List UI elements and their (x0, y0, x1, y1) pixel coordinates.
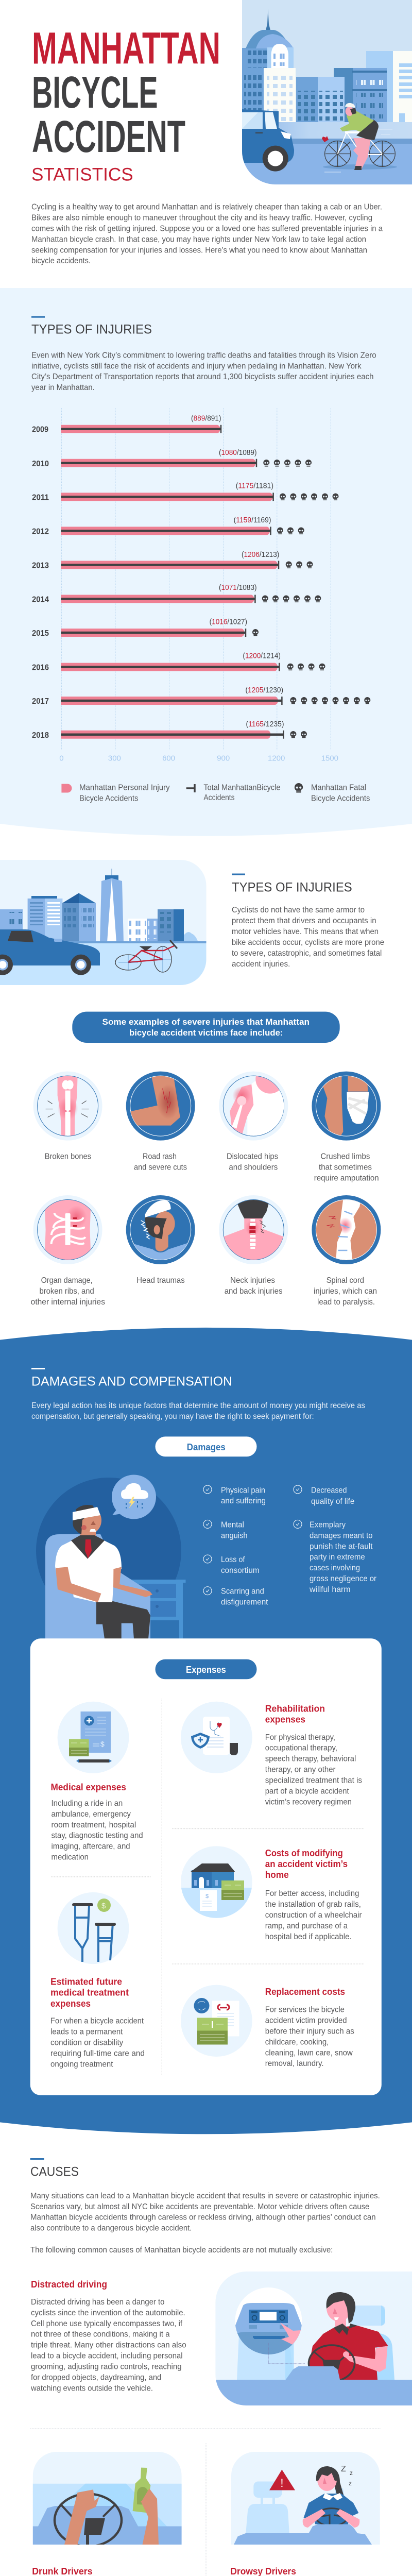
icon: medical bill (58, 1702, 129, 1773)
text: cyclists armor: to severe, catastrophic, and sometimes fatal (232, 949, 382, 958)
text: medical expenses: Medical expenses (50, 1782, 126, 1792)
labels: injury types: and back injuries (225, 1287, 283, 1296)
title: BICYCLE (32, 67, 158, 117)
text: causes intro: also contribute to a dangerous bicycle accident. (30, 2224, 192, 2233)
bar chart: bicycle accidents by year: (1016/1027) (210, 618, 247, 626)
text: costs of modifying home: home (265, 1870, 289, 1880)
text: causes intro (30, 2192, 380, 2255)
intro text: Bikes are also nimble enough to maneuver throughout the city and its heavy traffic. However, cycling (31, 213, 372, 222)
text: costs of modifying home (265, 1848, 362, 1941)
text: rehabilitation expenses: For physical therapy, (265, 1733, 335, 1742)
icon: rehabilitation (181, 1702, 252, 1773)
labels: injury types: Road rash (143, 1152, 177, 1161)
list: damages checklist: Exemplary (310, 1520, 346, 1529)
list: damages checklist: Decreased (311, 1486, 347, 1495)
labels: injury types: injuries, which can (314, 1287, 377, 1296)
text: distracted driving: grooming, adjusting radio controls, reaching (31, 2363, 182, 2371)
icon: broken bones (33, 1072, 102, 1141)
text: injuries intro: City’s Department of Transportation reports that around 1,300 bicyclists suffer accident injuries each (31, 372, 374, 381)
list: damages checklist: and suffering (221, 1497, 266, 1505)
text: future medical: condition or disability (50, 2038, 124, 2047)
icon: dislocated hips (219, 1065, 288, 1141)
text: costs of modifying home: For better access, including (265, 1889, 359, 1898)
intro text (31, 203, 383, 265)
bar chart: bicycle accidents by year: (1200/1214) (243, 652, 281, 660)
button: expenses (156, 1659, 256, 1679)
text: cyclists armor: motor vehicles have. This means that when (232, 927, 379, 936)
text: future medical: For when a bicycle accident (50, 2017, 144, 2026)
title: STATISTICS (31, 164, 133, 184)
list: damages checklist: party in extreme (310, 1553, 365, 1562)
text: replacement costs: childcare, cooking, (265, 2038, 329, 2046)
icon: head trauma (126, 1195, 195, 1264)
intro text: Cycling is a healthy way to get around Manhattan and is relatively cheaper than taking a cab or an Uber. (31, 203, 382, 211)
text: distracted driving: triple threat. Many other distractions can also (31, 2341, 186, 2350)
labels: injury types: lead to paralysis. (317, 1298, 375, 1307)
labels: injury types: Crushed limbs (320, 1152, 370, 1161)
text: cyclists armor (232, 906, 384, 969)
text: replacement costs: Replacement costs (265, 1987, 345, 1997)
bar chart: bicycle accidents by year: 2011 (32, 493, 49, 502)
intro text: comes with the risk of getting injured. Suppose you or a loved one has suffered preventable injuries in a (31, 224, 383, 233)
text: costs of modifying home: hospital bed if applicable. (265, 1933, 352, 1941)
text: distracted driving: watching events outside the vehicle. (30, 2384, 153, 2393)
text: future medical: medical treatment (50, 1987, 129, 1997)
text: rehabilitation expenses: part of a bicycle accident (265, 1787, 349, 1796)
icon: crutches: $ (101, 1902, 106, 1910)
text: distracted driving: Distracted driving (31, 2279, 107, 2290)
list: damages checklist: Loss of (221, 1555, 245, 1564)
bar chart: bicycle accidents by year: 2016 (32, 664, 49, 672)
title: MANHATTAN (32, 23, 220, 73)
icon: neck injuries (219, 1195, 288, 1264)
text: future medical: Estimated future (50, 1976, 122, 1987)
list: damages checklist: Mental (221, 1520, 244, 1529)
text: distracted driving: cyclists since the invention of the automobile. (31, 2309, 185, 2317)
legend: Total ManhattanBicycle (203, 783, 280, 792)
text: causes intro: The following common causes of Manhattan bicycle accidents are not mutually exclusive: (30, 2246, 333, 2255)
labels: injury types: that sometimes (319, 1163, 372, 1172)
bar chart: bicycle accidents by year: 2018 (32, 731, 49, 740)
legend: Bicycle Accidents (79, 794, 139, 803)
text: damages intro: compensation, but generally speaking, you may have the right to seek payment for: (31, 1412, 314, 1421)
bar chart: bicycle accidents by year: 2014 (32, 596, 49, 604)
intro text: seeking compensation for your injuries and losses. Here’s what you need to know about Manhattan (31, 246, 367, 255)
text: injuries intro: year in Manhattan. (31, 383, 95, 392)
illustration: city with car and crashed bicycle (0, 860, 207, 985)
icon: medical bill: $ (100, 1740, 105, 1748)
text: cyclists armor: protect them that drivers and occupants in (232, 917, 376, 925)
bar chart: bicycle accidents by year: 2015 (32, 629, 49, 638)
heading: types of injuries second: TYPES OF INJURIES (232, 880, 352, 894)
text: cyclists armor: accident injuries. (232, 960, 290, 969)
text: rehabilitation expenses: Rehabilitation (265, 1704, 325, 1714)
bar chart: bicycle accidents by year: 300 (108, 754, 121, 762)
text: distracted driving (30, 2279, 186, 2393)
intro text: Manhattan bicycle crash. In that case, you may have rights under New York law to take legal action (31, 235, 366, 244)
text: distracted driving: Distracted driving has been a danger to (31, 2298, 164, 2307)
illustration: distracted driver touching radio (215, 2272, 412, 2405)
text: medical expenses: ambulance, emergency (52, 1810, 131, 1819)
illustration: city skyline with car and cyclist (242, 0, 412, 184)
section rule (232, 874, 245, 875)
icon: road rash (126, 1072, 195, 1141)
legend: Manhattan Personal Injury (79, 783, 170, 792)
illustration: drunk driver with bottle (32, 2452, 182, 2547)
list: damages checklist: disfigurement (221, 1598, 268, 1607)
illustration: drowsy driver: z (350, 2469, 353, 2477)
text: costs of modifying home: construction of a wheelchair (265, 1911, 362, 1920)
labels: injury types: other internal injuries (31, 1298, 105, 1307)
text: replacement costs: accident victim provided (265, 2016, 347, 2025)
text: replacement costs: before their injury such as (265, 2027, 354, 2036)
text: medical expenses: imaging, aftercare, and (52, 1842, 130, 1851)
list: damages checklist: willful harm (309, 1585, 351, 1594)
legend: Manhattan Fatal (311, 783, 366, 792)
text: future medical: requiring full-time care and (50, 2049, 145, 2058)
text: costs of modifying home: ramp, and purchase of a (265, 1922, 348, 1930)
text: cyclists armor: bike accidents occur, cyclists are more prone (232, 938, 384, 947)
text: future medical: leads to a permanent (50, 2028, 123, 2036)
title: ACCIDENT (32, 112, 185, 162)
legend: Bicycle Accidents (311, 794, 370, 803)
button: damages: Damages (187, 1442, 226, 1452)
list: damages checklist: cases involving (310, 1564, 360, 1572)
bar chart: bicycle accidents by year: (1159/1169) (234, 516, 271, 524)
text: distracted driving: lead to a bicycle accident, including personal (31, 2352, 183, 2361)
text: future medical: ongoing treatment (50, 2060, 113, 2069)
text: medical expenses (50, 1782, 143, 1862)
illustration: drowsy driver: Z (341, 2465, 346, 2473)
labels: injury types: Dislocated hips (227, 1152, 278, 1161)
section: hero header (31, 0, 412, 265)
text: replacement costs: removal, laundry. (265, 2059, 324, 2068)
legend: Accidents (203, 793, 235, 802)
panel: damages and compensation (0, 1328, 412, 2134)
labels: injury types: and severe cuts (134, 1163, 187, 1172)
text: rehabilitation expenses: specialized treatment that is (265, 1776, 362, 1785)
title (31, 23, 220, 184)
list: damages checklist: damages meant to (310, 1531, 373, 1540)
icon: crutches (58, 1892, 129, 1964)
text: causes intro: Scenarios vary, but almost all NYC bike accidents are preventable. Motor vehicle drivers often cause (30, 2202, 369, 2211)
text: damages intro: Every legal action has its unique factors that determine the amount of money you might receive as (31, 1401, 365, 1410)
legend (61, 783, 370, 803)
callout: severe injuries examples (72, 1012, 340, 1043)
list: damages checklist: Physical pain (221, 1486, 265, 1495)
bar chart: bicycle accidents by year: (1206/1213) (242, 551, 279, 559)
bar chart: bicycle accidents by year (32, 408, 370, 762)
text: medical expenses: stay, diagnostic testing and (52, 1832, 143, 1840)
bar chart: bicycle accidents by year: (1205/1230) (245, 686, 283, 694)
icon: house modification (180, 1846, 252, 1919)
bar chart: bicycle accidents by year: 2009 (32, 426, 48, 434)
labels: injury types: and shoulders (229, 1163, 278, 1172)
list: damages checklist (203, 1485, 376, 1607)
bar chart: bicycle accidents by year: 900 (217, 754, 230, 762)
labels: injury types: Neck injuries (230, 1276, 275, 1285)
text: future medical: expenses (50, 1998, 91, 2009)
text: replacement costs (265, 1987, 354, 2068)
heading: damages and compensation: DAMAGES AND COMPENSATION (31, 1375, 232, 1389)
bar chart: bicycle accidents by year: (1080/1089) (219, 449, 256, 457)
list: damages checklist: Scarring and (221, 1587, 264, 1596)
card: expenses (30, 1638, 382, 2095)
callout: severe injuries examples: bicycle accident victims face include: (129, 1028, 283, 1038)
labels: injury types: Broken bones (45, 1152, 91, 1161)
list: damages checklist: punish the at-fault (310, 1542, 373, 1551)
text: rehabilitation expenses: victim’s recovery regimen (265, 1798, 352, 1806)
text: medical expenses: Including a ride in an (52, 1799, 123, 1808)
illustration: injured man in chair (36, 1475, 185, 1641)
list: damages checklist: quality of life (311, 1497, 354, 1506)
heading: types of injuries: TYPES OF INJURIES (31, 323, 152, 337)
text: replacement costs: cleaning, lawn care, snow (265, 2048, 353, 2057)
text: rehabilitation expenses: therapy, or any other (265, 1766, 336, 1774)
illustration: drowsy driver: ! (280, 2477, 283, 2489)
bar chart: bicycle accidents by year: 0 (59, 754, 64, 762)
text: rehabilitation expenses: speech therapy, behavioral (265, 1755, 356, 1764)
text: causes intro: Many situations can lead to a Manhattan bicycle accident that results in severe or catastrophic injuries. (30, 2192, 380, 2200)
panel: types of injuries statistics (0, 288, 412, 836)
bar chart: bicycle accidents by year: 1200 (268, 754, 285, 762)
text: costs of modifying home: Costs of modifying (265, 1848, 343, 1858)
bar chart: bicycle accidents by year: (1165/1235) (246, 720, 284, 728)
text: costs of modifying home: an accident victim’s (265, 1859, 348, 1869)
labels: injury types: Spinal cord (327, 1276, 364, 1285)
bar chart: bicycle accidents by year: (1071/1083) (219, 584, 256, 592)
text: replacement costs: For services the bicycle (265, 2005, 345, 2014)
list: damages checklist: gross negligence or (310, 1574, 376, 1583)
bar chart: bicycle accidents by year: (889/891) (191, 414, 221, 422)
list: damages checklist: consortium (221, 1566, 260, 1575)
heading: causes: CAUSES (30, 2165, 79, 2179)
text: distracted driving: not three of these conditions, making it a (31, 2330, 170, 2339)
labels: injury types (31, 1152, 379, 1307)
illustration: drowsy driver (231, 2452, 380, 2545)
intro text: bicycle accidents. (31, 257, 91, 265)
bar chart: bicycle accidents by year: 2017 (32, 697, 49, 706)
panel: severe injuries (0, 860, 384, 1307)
panel: causes (0, 2158, 412, 2576)
text: medical expenses: room treatment, hospital (52, 1821, 136, 1829)
bar chart: bicycle accidents by year: 2012 (32, 527, 49, 536)
text: future medical (50, 1976, 145, 2069)
labels: injury types: Organ damage, (41, 1276, 93, 1285)
text: cyclists armor: Cyclists do not have the same armor to (232, 906, 365, 914)
labels: injury types: Head traumas (136, 1276, 185, 1285)
text: injuries intro: Even with New York City’s commitment to lowering traffic deaths and fatalities through its Vision Zero (31, 351, 376, 360)
icon: crushed limbs (312, 1072, 381, 1141)
illustration: drowsy driver: z (349, 2480, 352, 2487)
icon: spinal cord (312, 1195, 381, 1264)
text: medical expenses: medication (52, 1853, 89, 1862)
labels: injury types: require amputation (314, 1174, 379, 1182)
icon: house modification: $ (205, 1893, 209, 1900)
text: causes intro: Manhattan bicycle accidents through careless or reckless driving, although other parties’ conduct can (30, 2213, 376, 2222)
text: rehabilitation expenses: expenses (265, 1715, 305, 1725)
button: damages (156, 1436, 256, 1456)
text: rehabilitation expenses (265, 1704, 362, 1806)
text: damages intro (31, 1401, 365, 1421)
text: distracted driving: for dropped objects, daydreaming, and (31, 2373, 161, 2382)
bar chart: bicycle accidents by year: 2010 (32, 460, 49, 468)
icon: broken ribs (33, 1195, 102, 1264)
text: injuries intro (31, 351, 376, 392)
bar chart: bicycle accidents by year: (1175/1181) (236, 482, 273, 490)
text: distracted driving: Cell phone use typically encompasses two, if (31, 2319, 183, 2328)
bar chart: bicycle accidents by year: 1500 (321, 754, 338, 762)
text: costs of modifying home: the installation of grab rails, (265, 1900, 361, 1909)
bar chart: bicycle accidents by year: 600 (162, 754, 175, 762)
button: expenses: Expenses (186, 1665, 226, 1675)
list: damages checklist: anguish (221, 1531, 248, 1540)
labels: injury types: broken ribs, and (39, 1287, 94, 1296)
bar chart: bicycle accidents by year: 2013 (32, 562, 49, 570)
text: rehabilitation expenses: occupational therapy, (265, 1744, 337, 1753)
callout: severe injuries examples: Some examples of severe injuries that Manhattan (102, 1017, 310, 1027)
icon: replacement costs (181, 1985, 252, 2057)
text: injuries intro: initiative, cyclists still face the risk of accidents and injury when pedaling in Manhattan. New York (31, 362, 362, 370)
